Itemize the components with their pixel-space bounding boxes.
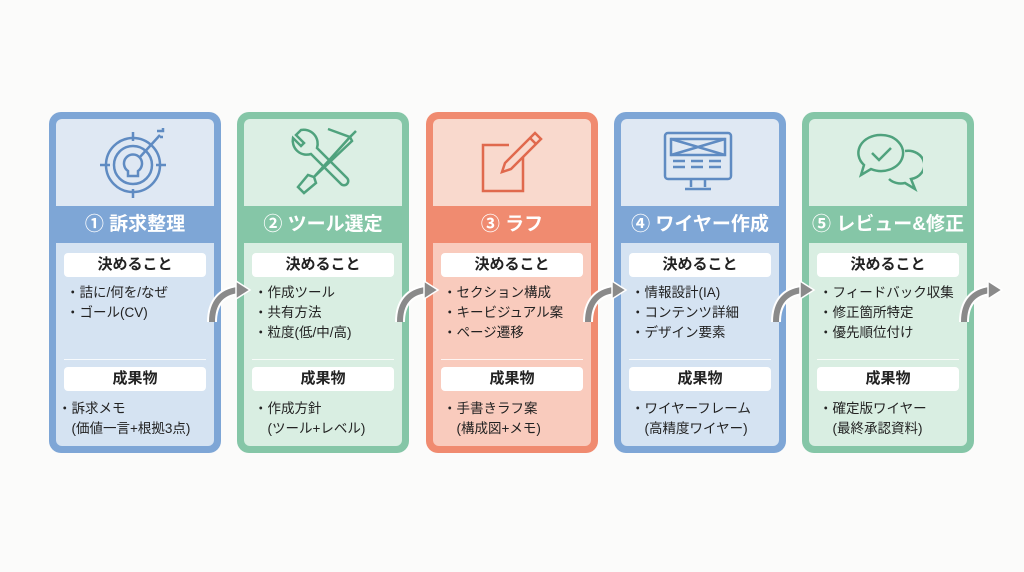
body: ・訴求メモ: [58, 401, 126, 416]
body: 決めること: [662, 256, 738, 273]
body: ・作成方針: [254, 401, 322, 416]
title: ③ ラフ: [481, 214, 543, 235]
body: (価値一言+根拠3点): [71, 421, 190, 436]
body: ・デザイン要素: [631, 325, 726, 340]
icon: monitor wireframe: [621, 119, 779, 206]
body: 決めること: [474, 256, 550, 273]
body: ・コンテンツ詳細: [631, 305, 739, 320]
body: [56, 243, 214, 446]
body: ・優先順位付け: [819, 325, 914, 340]
card 5: レビュー&修正: [802, 112, 974, 453]
icon: tools: [244, 119, 402, 206]
card 2: ツール選定: [237, 112, 409, 453]
arrow 1: [207, 280, 251, 322]
body: ・セクション構成: [443, 285, 551, 300]
icon: chat check: [809, 119, 967, 206]
card 3: ラフ: [426, 112, 598, 453]
body: (高精度ワイヤー): [644, 421, 748, 436]
body: ・手書きラフ案: [443, 401, 538, 416]
body: [809, 243, 967, 446]
body: 成果物: [112, 370, 158, 387]
body: ・作成ツール: [254, 285, 335, 300]
body: [433, 243, 591, 446]
body: 決めること: [97, 256, 172, 273]
title: ② ツール選定: [263, 214, 383, 235]
icon: pencil square: [433, 119, 591, 206]
body: (ツール+レベル): [267, 421, 365, 436]
body: 成果物: [865, 370, 910, 387]
title: ④ ワイヤー作成: [631, 214, 769, 235]
body: ・共有方法: [254, 305, 322, 320]
body: ・情報設計(IA): [631, 285, 720, 300]
body: ・ゴール(CV): [66, 305, 148, 320]
body: [621, 243, 779, 446]
body: ・修正箇所特定: [819, 305, 914, 320]
title: ① 訴求整理: [85, 214, 185, 235]
title: ⑤ レビュー&修正: [812, 214, 964, 235]
body: ・フィードバック収集: [819, 285, 954, 300]
body: ・粒度(低/中/高): [254, 325, 352, 340]
body: 成果物: [300, 370, 346, 387]
body: ・ページ遷移: [443, 325, 524, 340]
body: 成果物: [489, 370, 534, 387]
body: 成果物: [677, 370, 722, 387]
body: ・キービジュアル案: [443, 305, 563, 320]
arrow 3: [583, 282, 627, 322]
icon: target bulb: [56, 119, 214, 206]
body: [244, 243, 402, 446]
body: ・詰に/何を/なぜ: [66, 285, 168, 300]
body: (最終承認資料): [832, 421, 922, 436]
body: (構成図+メモ): [456, 421, 541, 436]
body: 決めること: [850, 256, 926, 273]
body: 決めること: [285, 256, 360, 273]
body: ・確定版ワイヤー: [819, 401, 927, 416]
body: ・ワイヤーフレーム: [631, 401, 751, 416]
arrow 2: [395, 282, 440, 322]
card 1: 訴求整理: [49, 112, 221, 453]
arrow 4: [771, 282, 815, 322]
card 4: ワイヤー作成: [614, 112, 786, 453]
arrow 5: [959, 282, 1000, 322]
